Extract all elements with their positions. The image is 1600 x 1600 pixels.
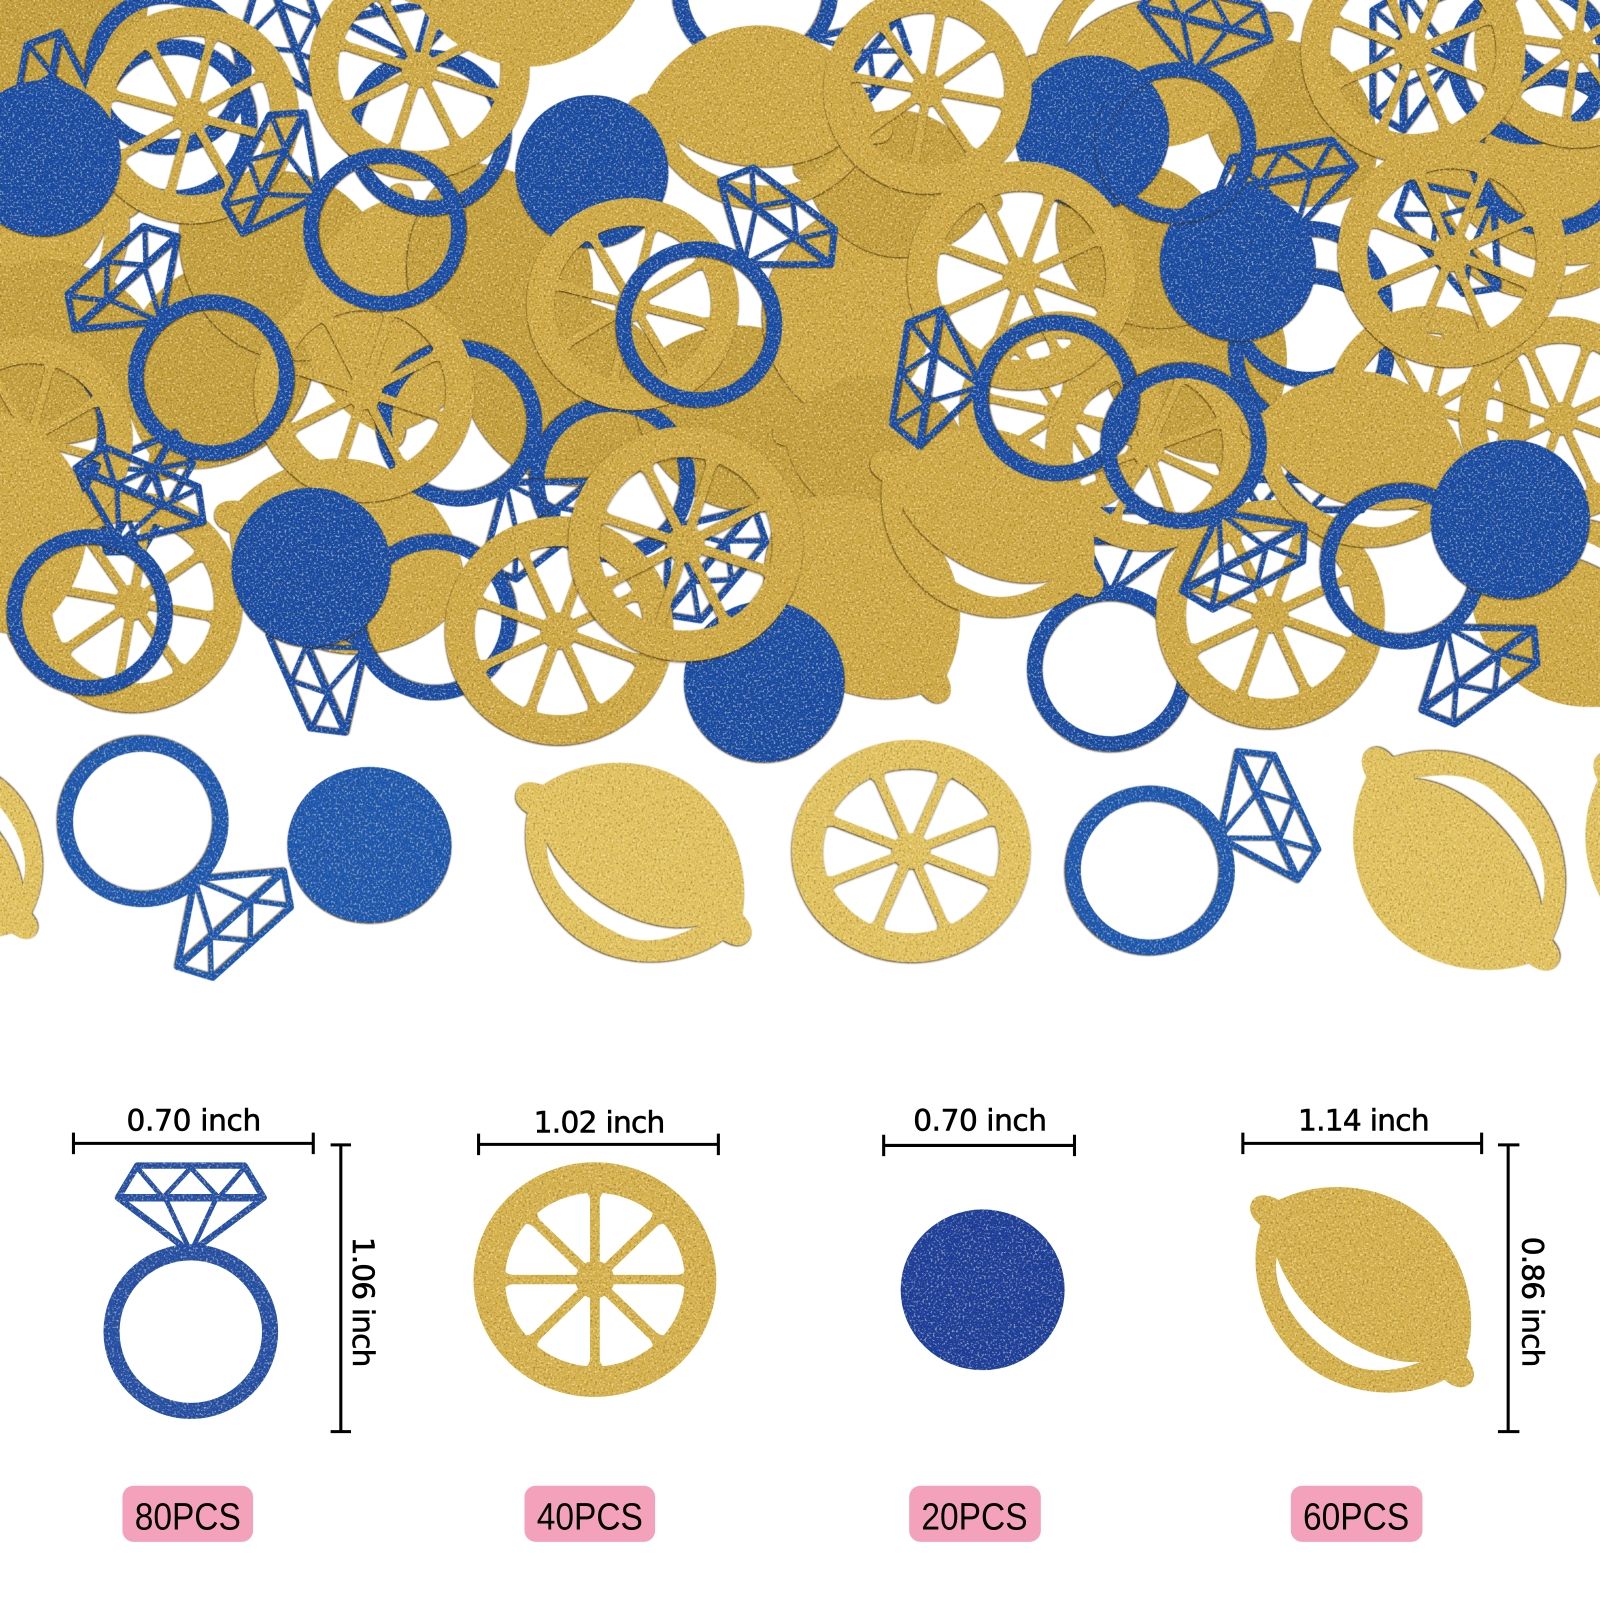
hidden back ring centre	[506, 373, 782, 639]
backing lemon left	[0, 111, 180, 389]
ring centre front	[593, 153, 854, 430]
dot width label: 0.70 inch	[913, 1104, 1047, 1138]
loose lemon	[467, 707, 803, 1018]
wheel icon	[489, 1178, 701, 1382]
dot quantity text: 20PCS	[921, 1496, 1028, 1538]
lemon height bracket	[1498, 1145, 1519, 1432]
dot upper centre	[515, 95, 668, 248]
backing lemon upper gap	[368, 119, 632, 432]
back ring top centre	[649, 0, 925, 149]
back wheel far right	[1447, 305, 1600, 532]
hidden back ring right	[1381, 47, 1600, 313]
ring upper right	[1087, 0, 1284, 232]
wheel top right	[1286, 0, 1540, 178]
loose confetti row	[0, 687, 1600, 1034]
dot top left	[0, 80, 121, 236]
backing lemon upper right gap	[1154, 0, 1428, 255]
back wheel centre	[956, 308, 1167, 519]
loose lemon cropped left	[0, 702, 95, 991]
lemon upper centre	[620, 14, 901, 220]
backing lemon upper left centre	[125, 119, 447, 411]
dot icon	[901, 1209, 1065, 1370]
ring height label: 1.06 inch	[346, 1237, 380, 1367]
backing lemon behind dot	[183, 418, 511, 694]
dot upper right	[1015, 55, 1169, 210]
lemon width label: 1.14 inch	[1298, 1104, 1430, 1138]
back wheel centre right	[1030, 331, 1266, 567]
backing lemon top left	[0, 0, 202, 177]
wheel width bracket	[479, 1134, 718, 1155]
dot centre right	[1160, 185, 1316, 341]
ring lower left	[0, 437, 221, 711]
loose blue dot	[287, 767, 451, 923]
backing lemon far left	[0, 239, 198, 466]
hidden back ring top	[72, 0, 343, 168]
back wheel left	[0, 330, 139, 548]
dot right	[1431, 440, 1590, 599]
wheel left centre	[243, 271, 485, 513]
backing lemon lower centre	[706, 436, 1018, 758]
backing lemon behind open ring	[296, 180, 489, 452]
backing lemon right centre	[1062, 196, 1326, 508]
loose wheel	[776, 725, 1047, 977]
back ring lower	[258, 518, 533, 751]
ring right centre	[1082, 344, 1325, 621]
backing lemon behind centre ring	[762, 194, 931, 439]
lemon centre large	[827, 376, 1149, 668]
backing lemon lower right	[1416, 466, 1600, 758]
wheel top	[299, 0, 540, 190]
size panel: lemon	[1194, 1104, 1549, 1542]
lemon right large	[1215, 337, 1509, 581]
ring centre right	[888, 299, 1143, 484]
hidden back ring right top	[1372, 0, 1600, 137]
ring width label: 0.70 inch	[127, 1104, 261, 1138]
ring quantity text: 80PCS	[135, 1496, 241, 1538]
dot lower centre	[684, 601, 845, 762]
wheel lower	[432, 503, 687, 758]
ring left	[49, 209, 318, 484]
ring height bracket	[331, 1145, 351, 1432]
dot lower left	[232, 488, 391, 647]
size panel: dot	[884, 1104, 1074, 1542]
back ring behind dot	[1207, 135, 1397, 392]
size panel: ring	[73, 1104, 380, 1542]
back wheel right	[1320, 299, 1537, 517]
ring open upper left	[213, 93, 484, 329]
dot width bracket	[884, 1135, 1074, 1156]
size panel: wheel	[479, 1106, 718, 1542]
wheel centre	[521, 192, 745, 416]
backing lemon lower gap	[760, 358, 995, 540]
lemon width bracket	[1243, 1133, 1482, 1154]
lemon left edge	[0, 368, 118, 673]
backing lemon centre	[415, 261, 728, 525]
wheel top left	[76, 0, 306, 231]
loose blue ring	[33, 712, 310, 995]
ring icon	[112, 1166, 270, 1411]
wheel lower centre front	[557, 415, 814, 673]
back wheel lower left	[22, 491, 244, 713]
hidden back ring behind wheel	[327, 0, 516, 220]
loose lemon right	[1290, 687, 1600, 1034]
back ring top right	[1402, 0, 1600, 108]
lemon quantity badge	[1291, 1486, 1422, 1542]
wheel width label: 1.02 inch	[534, 1106, 665, 1140]
wheel lower right	[1143, 487, 1398, 742]
loose blue ring right	[1048, 732, 1329, 973]
loose lemon cropped right	[1527, 697, 1600, 1018]
lemon quantity text: 60PCS	[1303, 1496, 1409, 1538]
confetti pile photo	[0, 0, 1600, 762]
backing lemon upper middle gap	[780, 93, 1015, 274]
dot quantity badge	[909, 1486, 1041, 1542]
wheel centre right	[894, 148, 1149, 403]
back ring eye shape	[1236, 277, 1387, 510]
backing lemon right	[1370, 58, 1600, 350]
ring width bracket	[73, 1133, 313, 1154]
wheel top centre	[823, 0, 1032, 195]
ring quantity badge	[122, 1486, 253, 1542]
back ring lower right	[1035, 510, 1186, 744]
lemon icon	[1194, 1126, 1533, 1454]
wheel quantity badge	[524, 1486, 655, 1542]
wheel quantity text: 40PCS	[537, 1496, 643, 1538]
ring lower right	[1298, 461, 1557, 739]
backing lemon behind ring	[73, 201, 365, 523]
back ring far left	[0, 325, 205, 573]
hidden back ring left	[5, 21, 261, 210]
back wheel top right	[1476, 0, 1600, 146]
back ring centre	[353, 317, 616, 595]
wheel right	[1323, 124, 1581, 382]
lemon top	[386, 0, 675, 84]
backing lemon mid right gap	[1006, 112, 1280, 377]
lemon upper right	[1002, 0, 1310, 170]
backing lemon centre gap	[589, 287, 901, 550]
lemon height label: 0.86 inch	[1515, 1237, 1549, 1367]
